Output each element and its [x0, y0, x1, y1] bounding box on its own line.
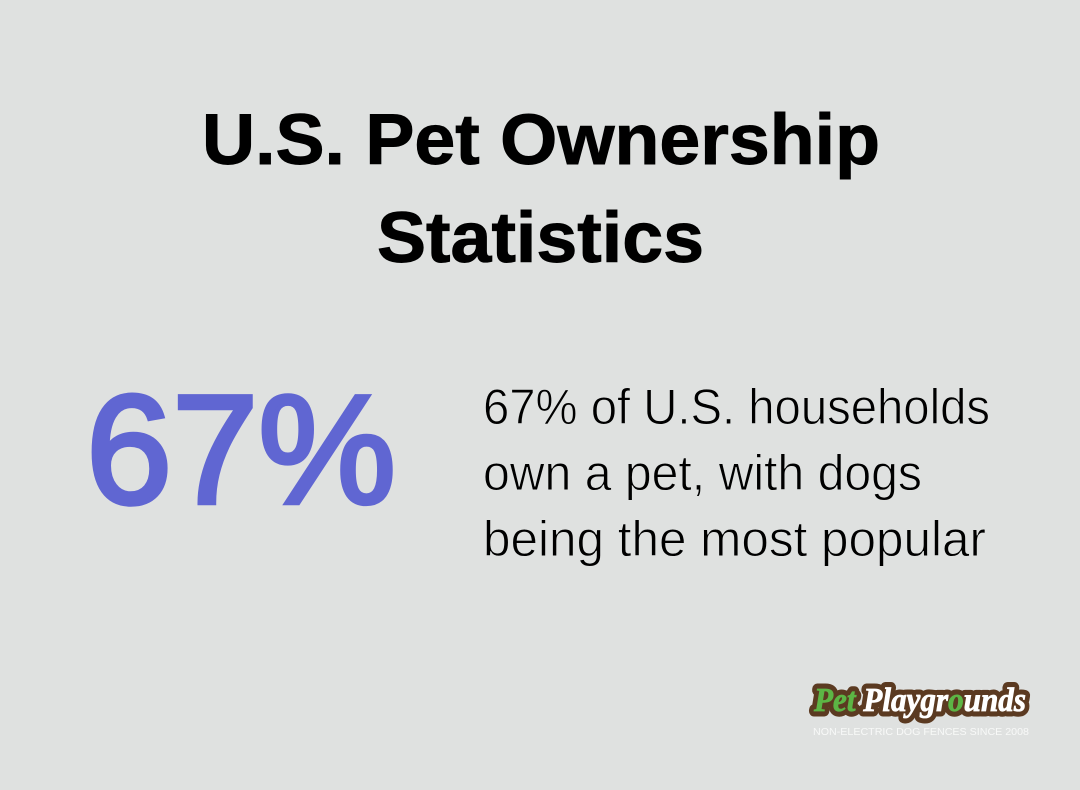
logo wordmark: Pet Playgrounds	[813, 682, 1026, 719]
logo tagline: NON-ELECTRIC DOG FENCES SINCE 2008	[813, 727, 1029, 738]
logo: Pet Playgrounds	[813, 682, 1029, 738]
title	[202, 101, 880, 278]
description text: being the most popular	[483, 511, 986, 567]
description text: own a pet, with dogs	[483, 445, 922, 501]
description text	[483, 379, 990, 567]
title: U.S. Pet Ownership	[202, 101, 880, 180]
logo wordmark: Pet Playgrounds	[813, 682, 1026, 719]
description text: 67% of U.S. households	[483, 379, 990, 435]
title: Statistics	[377, 199, 704, 278]
big statistic: 67%: 67%	[86, 363, 396, 536]
